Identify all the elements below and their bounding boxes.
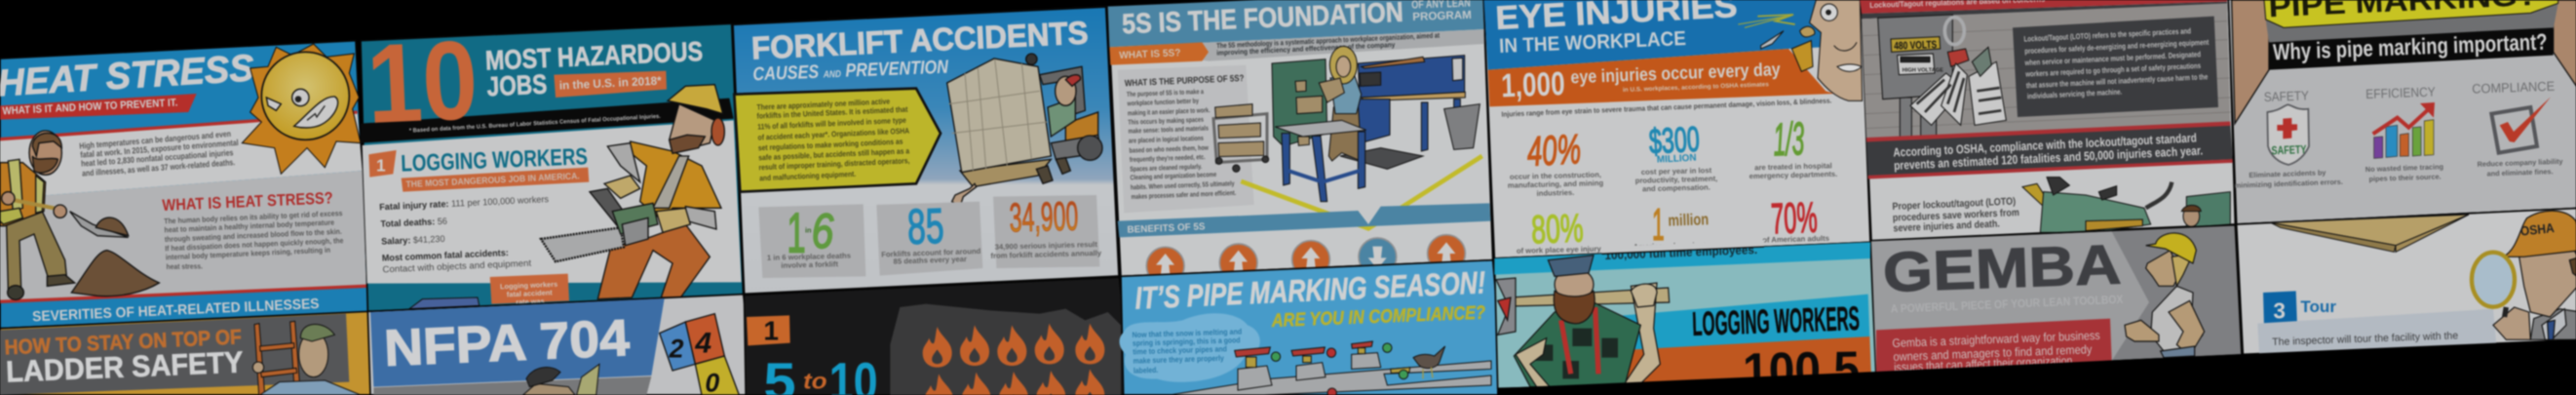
illustration: OSHA inspector: OSHA [2519,220,2556,239]
headline number: 1,000 [1501,65,1565,104]
icon: flames [923,324,1104,395]
illustration: logger with chainsaw [541,85,724,299]
text box: LOTO definition: procedures for safely de-energizing and re-energizing equipment [2024,38,2210,56]
panel: purpose of 5S: Cleaning and organization become [1130,172,1216,181]
panel: purpose of 5S: The purpose of 5S is to make a [1127,89,1204,99]
subtitle: CAUSES AND PREVENTION [752,58,949,85]
title suffix [1411,0,1472,23]
illustration: electrical panel: 480 VOLTS [1894,39,1937,53]
text box: LOTO definition [2013,17,2218,117]
band: OSHA statistic: prevents an estimated 120 fatalities and 50,000 injuries each year. [1894,144,2203,173]
stat: 40 percent [1508,126,1603,198]
stat box: one in six: 1 [787,202,806,264]
illustration: blue hat remnant [409,297,480,309]
stat: 300 million: and compensation. [1642,182,1711,193]
big number: 10 [365,18,481,147]
bottom black strip [1497,339,2576,395]
text cloud [1120,313,1260,382]
stat box: one in six: 6 [812,204,833,258]
job stats: Fatal injury rate: 111 per 100,000 workers [379,194,550,212]
step number: 3 [2273,298,2286,324]
stat: 40 percent: industries. [1536,188,1574,198]
callout: intro text: set regulations to make working conditions as [758,138,904,152]
body text: through sweating and increased blood flow to the skin. [165,227,342,244]
stat box: 34,900 injuries [990,192,1102,268]
label: what is 5S: WHAT IS 5S? [1119,48,1181,61]
text box: LOTO definition: when service or maintenance must be performed. Designated [2024,50,2201,67]
panel: eye injuries [1483,0,1870,258]
panel: purpose of 5S: This occurs by making spaces [1128,117,1204,127]
description: The 5S methodology is a systematic approach to workplace organization, aimed at [1216,31,1441,50]
column: safety: minimizing identification errors. [2235,178,2343,190]
column: safety [2235,88,2343,190]
panel: purpose of 5S: make sense: tools and materials [1128,126,1209,136]
panel: pipe marking [2227,0,2576,224]
title line: MOST HAZARDOUS [484,36,704,76]
step text: The inspector will tour the facility with the [2272,330,2458,348]
job stats: Most common fatal accidents: [382,248,509,263]
stat: 40 percent: manufacturing, and mining [1508,178,1603,190]
date tag: in the U.S. in 2018* [558,74,662,93]
panel: logging workers statistic [1494,240,1876,395]
body text: The human body relies on its ability to get rid of excess [164,209,343,225]
job stats: Contact with objects and equipment [382,258,532,274]
icon: hazard diamond: 4 [694,328,711,360]
panel: purpose of 5S: WHAT IS THE PURPOSE OF 5S? [1125,73,1245,88]
title: FORKLIFT ACCIDENTS [750,14,1089,66]
illustration: tidy workstation [1213,46,1480,202]
column: safety: SAFETY [2271,142,2307,157]
stat: 70 percent: 70% [1770,194,1818,243]
callout: intro text: There are approximately one million active [756,97,891,112]
illustration: electrical panel [1878,15,2006,143]
stat box: one in six: involve a forklift [781,259,839,270]
icon: hazard diamond [660,314,739,395]
panel: purpose of 5S [1118,65,1254,213]
panel: purpose of 5S: frequently they're needed, etc. [1130,154,1206,164]
text: proper procedures [1892,196,2019,234]
panel: NFPA 704 [367,295,755,395]
red callout [1876,319,2112,375]
illustration: OSHA inspector [2472,211,2576,339]
panel: lockout tagout [1860,0,2235,241]
heading line two: LADDER SAFETY [6,345,244,389]
column: efficiency [2365,85,2443,183]
band: benefits of 5S [1118,203,1490,237]
band: OSHA statistic: According to OSHA, compliance with the lockout/tagout standard [1893,131,2197,160]
intro text: and illnesses, as well as 37 work-related deaths. [82,157,235,178]
illustration: electrical panel: HIGH VOLTAGE [1903,67,1943,73]
band: OSHA statistic [1866,123,2233,178]
illustration: firefighter [523,364,599,395]
text: proper procedures: severe injuries and death. [1893,219,2000,234]
subtitle: ARE YOU IN COMPLIANCE? [1271,303,1486,332]
text box: LOTO definition: workers are required to go through a set of safety precautions [2024,61,2202,79]
number badge: 1 [763,315,779,345]
map: United States silhouette [890,304,1121,395]
panel: purpose of 5S: habits. When used correctly, 5S ultimately [1131,180,1235,191]
panel: purpose of 5S: are placed in logical locations [1129,136,1204,145]
stat box: 34,900 injuries: 34,900 [1009,192,1079,240]
text: proper procedures: Proper lockout/tagout (LOTO) [1892,196,2016,213]
step number [2263,291,2297,329]
body text: If heat dissipation does not happen quickly enough, the [165,236,344,253]
statistic [763,351,878,395]
stat: one third: are treated in hospital [1754,161,1832,172]
callout: intro text: of accident each year*. Organizations like OSHA [757,127,909,142]
heading line one: HOW TO STAY ON TOP OF [4,325,242,359]
stat: 300 million: cost per year in lost [1641,166,1712,177]
column: compliance: COMPLIANCE [2472,79,2555,97]
illustration: man on ladder [252,321,361,395]
text cloud: time to check your pipes and [1133,344,1227,356]
callout: fatal accident rate: Logging workers [500,280,557,291]
stat box: 34,900 injuries: from forklift accidents annually [990,249,1102,260]
intro text: heat led to 2,830 nonfatal occupational injuries [81,147,234,169]
intro text: High temperatures can be dangerous and even [79,129,231,151]
panel: purpose of 5S: Spaces are cleaned regularly. [1130,164,1202,174]
title suffix: PROGRAM [1412,9,1472,23]
panel: 5S foundation [1108,0,1493,285]
stat: one third: emergency departments. [1749,170,1837,180]
panel: ladder safety [0,311,377,395]
subtitle banner: WHAT IS IT AND HOW TO PREVENT IT. [2,98,178,117]
subtitle: IN THE WORKPLACE [1499,27,1686,58]
subtitle: A POWERFUL PIECE OF YOUR LEAN TOOLBOX [1891,293,2124,316]
stat: one million: 1 [1652,199,1665,250]
stat: one third [1749,113,1837,180]
band: benefits of 5S: BENEFITS OF 5S [1127,221,1206,236]
icon: sun [242,44,361,174]
intro sentence: Injuries range from eye strain to severe trauma that can cause permanent damage, vision loss, & blindness. [1501,96,1831,119]
stat: 40 percent: 40% [1526,126,1582,176]
step text [2257,309,2496,354]
panel: forklift accidents [733,7,1119,295]
banner with clipped title [2264,0,2558,27]
column: compliance: Reduce company liability [2477,157,2564,169]
text box: LOTO definition: Lockout/Tagout (LOTO) refers to the specific practices and [2023,26,2191,44]
intro text [79,129,239,178]
panel: gemba [1871,225,2242,375]
description: improving the efficiency and effectiveness of the company [1216,40,1396,58]
text cloud: spring is springing, this is a good [1133,336,1241,348]
stat: 80 percent: 80% [1530,205,1584,252]
panel: pipe marking season [1120,260,1504,395]
job stats: Total deaths: 56 [380,217,447,229]
job title: LOGGING WORKERS [401,143,588,178]
illustration: machine and operator [2022,178,2230,232]
column: efficiency: EFFICIENCY [2365,85,2436,101]
job stats [379,194,550,274]
text: proper procedures: procedures save workers from [1893,208,2019,224]
callout: fatal accident rate: fatal accident [507,288,553,298]
stat: 40 percent: occur in the construction, [1510,170,1601,181]
stat box: 85 deaths [876,198,982,276]
label: what is 5S [1109,42,1209,65]
footnote: * Based on data from the U.S. Bureau of Labor Statistics Census of Fatal Occupational Injuries. [409,114,661,135]
title: HEAT STRESS [0,47,255,104]
heading: what is heat stress: WHAT IS HEAT STRESS? [162,188,333,215]
stat: one third: 1/3 [1773,113,1805,166]
stat: 300 million: MILLION [1657,153,1697,166]
column: compliance [2472,79,2564,178]
panel: logging workers statistic: LOGGING WORKERS [1692,300,1861,343]
stat: 300 million: $300 [1648,119,1701,161]
panel: purpose of 5S: based on who needs them, how [1129,145,1209,155]
callout: fatal accident rate [490,274,569,306]
text box: LOTO definition: that assure the machine will not inadvertently cause harm to the [2026,72,2209,90]
column: efficiency: No wasted time tracing [2365,162,2443,174]
text cloud: Now that the snow is melting and [1132,327,1242,339]
icon: hazard diamond: 2 [669,335,684,364]
stat box: 85 deaths: 85 deaths every year [893,255,967,266]
callout: intro text: result of improper training, distracted operators, [758,156,910,172]
brick wall [1862,3,2230,139]
section heading: SEVERITIES OF HEAT-RELATED ILLNESSES [32,296,320,325]
red callout: Gemba is a straightforward way for business [1892,329,2100,350]
callout: intro text: 11% of all forklifts will be involved in some type [757,116,906,132]
stat: 300 million: productivity, treatment, [1635,175,1717,185]
column: safety: Eliminate accidents by [2249,168,2326,179]
stat box: one in six: in [805,225,812,234]
stat: 80 percent [1517,205,1602,256]
stat box: 85 deaths: Forklifts account for around [881,247,981,258]
body text: heat to maintain a healthy internal body temperature [164,217,334,234]
clipped text: employees: 100,000 full time employees. [1604,243,1757,262]
callout: intro text [734,89,941,192]
text box: LOTO definition: individuals servicing the machine. [2027,88,2122,100]
body text: heat stress. [167,261,203,271]
panel: fire statistics [744,277,1131,395]
description [1216,31,1441,58]
stat: 300 million [1635,119,1717,193]
column: efficiency: pipes to their source. [2368,172,2441,183]
body text: internal body temperature keeps rising, resulting in [166,246,331,261]
stat: one million: Americans have lost some [1634,240,1727,252]
job subtitle: THE MOST DANGEROUS JOB IN AMERICA. [405,171,580,189]
headline text: eye injuries occur every day [1570,59,1782,87]
stat: one million: million [1668,210,1709,230]
panel: OSHA inspection [2237,208,2576,354]
panel: 10 most hazardous jobs [361,18,744,311]
illustration: forklift and crate stack [947,54,1102,207]
column: compliance: and eliminate fines. [2486,167,2554,178]
floor marking [1241,156,1482,228]
callout: intro text: forklifts in the United States. It is estimated that [756,105,908,121]
column: safety: SAFETY [2264,88,2309,104]
illustration: worker in hard hat [2125,233,2205,358]
text cloud: make sure they are properly [1133,354,1225,366]
step title: Tour [2300,297,2337,316]
illustration: wooden board [2271,215,2469,252]
stat: 70 percent [1762,194,1829,245]
illustration: pipes and valves [1170,341,1491,395]
number badge [368,150,397,178]
illustration: injured face and spray [1738,0,1863,100]
panel: purpose of 5S: making it an easier place to work. [1128,107,1211,117]
title: IT’S PIPE MARKING SEASON! [1134,264,1486,316]
red callout: issues that can affect their organization [1894,354,2073,375]
body text [164,209,344,271]
title: GEMBA [1882,234,2122,304]
title jobs: JOBS [486,69,548,101]
date tag [554,71,667,98]
headline subtext: in U.S. workplaces, according to OSHA estimates [1623,81,1769,94]
panel: heat stress [0,41,368,329]
callout: intro text: and malfunctioning equipment. [759,170,856,182]
panel: purpose of 5S: makes processes safer and more efficient. [1131,190,1236,201]
illustration: lumberjack [1496,256,1670,387]
title: NFPA 704 [383,309,631,377]
intro text: fatal at work. In 2015, exposure to environmental [80,138,239,160]
stat: 70 percent: of American adults [1762,234,1829,245]
stat box: one in six [758,202,865,278]
text cloud: labeled. [1134,366,1158,375]
illustration: worker with shovel [0,131,159,299]
bar chart [2373,102,2435,158]
job stats: Salary: $41,230 [381,234,445,247]
stat box: 85 deaths: 85 [906,198,944,255]
callout: intro text: safe as possible, but accidents still happen as a [758,146,910,162]
stat: 80 percent: of work place eye injury [1517,245,1602,256]
number badge: 1 [376,156,386,176]
callout: fatal accident rate: rate was [516,296,545,306]
red callout: owners and managers to find and remedy [1893,342,2093,364]
stat box: one in six: 1 in 6 workplace deaths [767,252,851,262]
number badge [747,315,790,345]
stat box: 34,900 injuries: 34,900 serious injuries result [995,240,1097,252]
icons: benefit arrows [1146,235,1465,285]
panel: purpose of 5S: workplace function better by [1127,99,1199,107]
stat: one million [1634,199,1727,252]
statistic: to [803,368,827,393]
